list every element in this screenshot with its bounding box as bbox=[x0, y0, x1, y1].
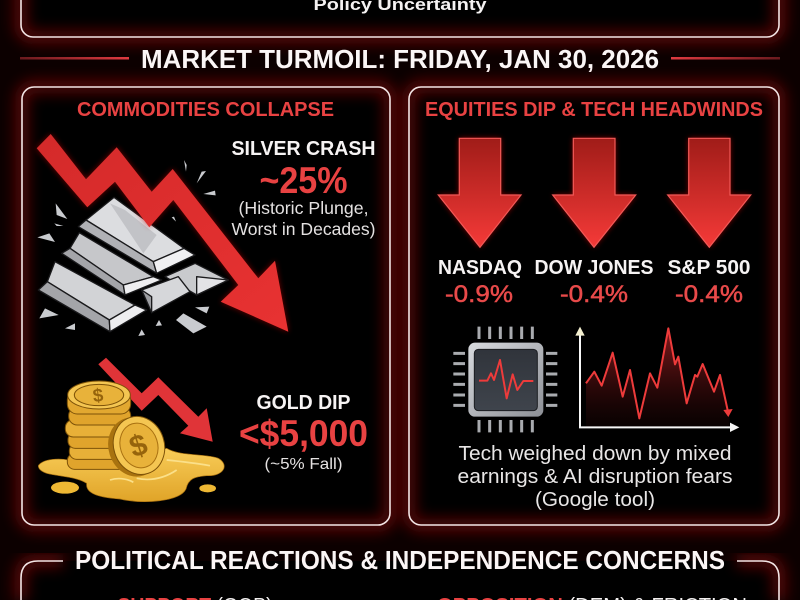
text: gold dip: <$5,000 bbox=[239, 413, 368, 454]
text: silver crash: (Historic Plunge, bbox=[238, 198, 368, 218]
icon: gold coins and puddle: $ bbox=[125, 428, 152, 464]
heading: commodities collapse: COMMODITIES COLLAPSE bbox=[77, 99, 334, 121]
stat: dow jones bbox=[534, 257, 654, 308]
icon: silver shards bbox=[37, 160, 216, 336]
gold puddle bbox=[38, 448, 224, 502]
dollar signs: $ bbox=[92, 384, 105, 406]
icon: cpu chip bbox=[453, 327, 557, 432]
text: gold dip: GOLD DIP bbox=[256, 392, 350, 414]
text: silver crash: Worst in Decades) bbox=[232, 219, 376, 239]
panel: political reactions bbox=[21, 545, 779, 600]
text: gold dip: (~5% Fall) bbox=[264, 456, 342, 473]
icon: gold dip arrow bbox=[98, 358, 213, 442]
stat: nasdaq bbox=[438, 257, 522, 308]
section heading: market turmoil: MARKET TURMOIL: FRIDAY, JAN 30, 2026 bbox=[141, 44, 659, 74]
chart: tech decline line bbox=[575, 327, 739, 432]
heading: political reactions: POLITICAL REACTIONS & INDEPENDENCE CONCERNS bbox=[75, 545, 725, 575]
icon: gold coins and puddle bbox=[38, 381, 224, 502]
stat: s&p 500 bbox=[668, 257, 750, 308]
text: tech caption: earnings & AI disruption fears bbox=[458, 466, 732, 488]
big coin bbox=[101, 409, 172, 483]
stat: dow jones: -0.4% bbox=[560, 281, 628, 308]
arrow: silver crash bbox=[37, 134, 288, 332]
text: tech caption bbox=[458, 443, 732, 511]
text: silver crash bbox=[232, 137, 376, 239]
stat: dow jones: DOW JONES bbox=[534, 257, 654, 279]
icon: silver bars bbox=[38, 197, 228, 332]
heading: equities: EQUITIES DIP & TECH HEADWINDS bbox=[425, 99, 763, 121]
stat: s&p 500: S&P 500 bbox=[668, 257, 750, 279]
text: tech caption: Tech weighed down by mixed bbox=[458, 443, 732, 465]
panel: commodities collapse bbox=[22, 87, 390, 525]
text: silver crash: ~25% bbox=[260, 160, 348, 201]
icon: dow jones arrow bbox=[553, 138, 636, 247]
icon: nasdaq arrow bbox=[438, 138, 521, 247]
stat: s&p 500: -0.4% bbox=[675, 281, 743, 308]
text: silver crash: SILVER CRASH bbox=[232, 137, 376, 160]
text: gold dip bbox=[239, 392, 368, 473]
text: tech caption: (Google tool) bbox=[535, 489, 655, 511]
icon: s&p arrow bbox=[668, 138, 751, 247]
panel: equities dip and tech headwinds bbox=[409, 87, 779, 525]
coin stack bbox=[65, 381, 131, 469]
stat: nasdaq: -0.9% bbox=[445, 281, 513, 308]
panel: top summary bbox=[21, 0, 779, 37]
stat: nasdaq: NASDAQ bbox=[438, 257, 522, 279]
